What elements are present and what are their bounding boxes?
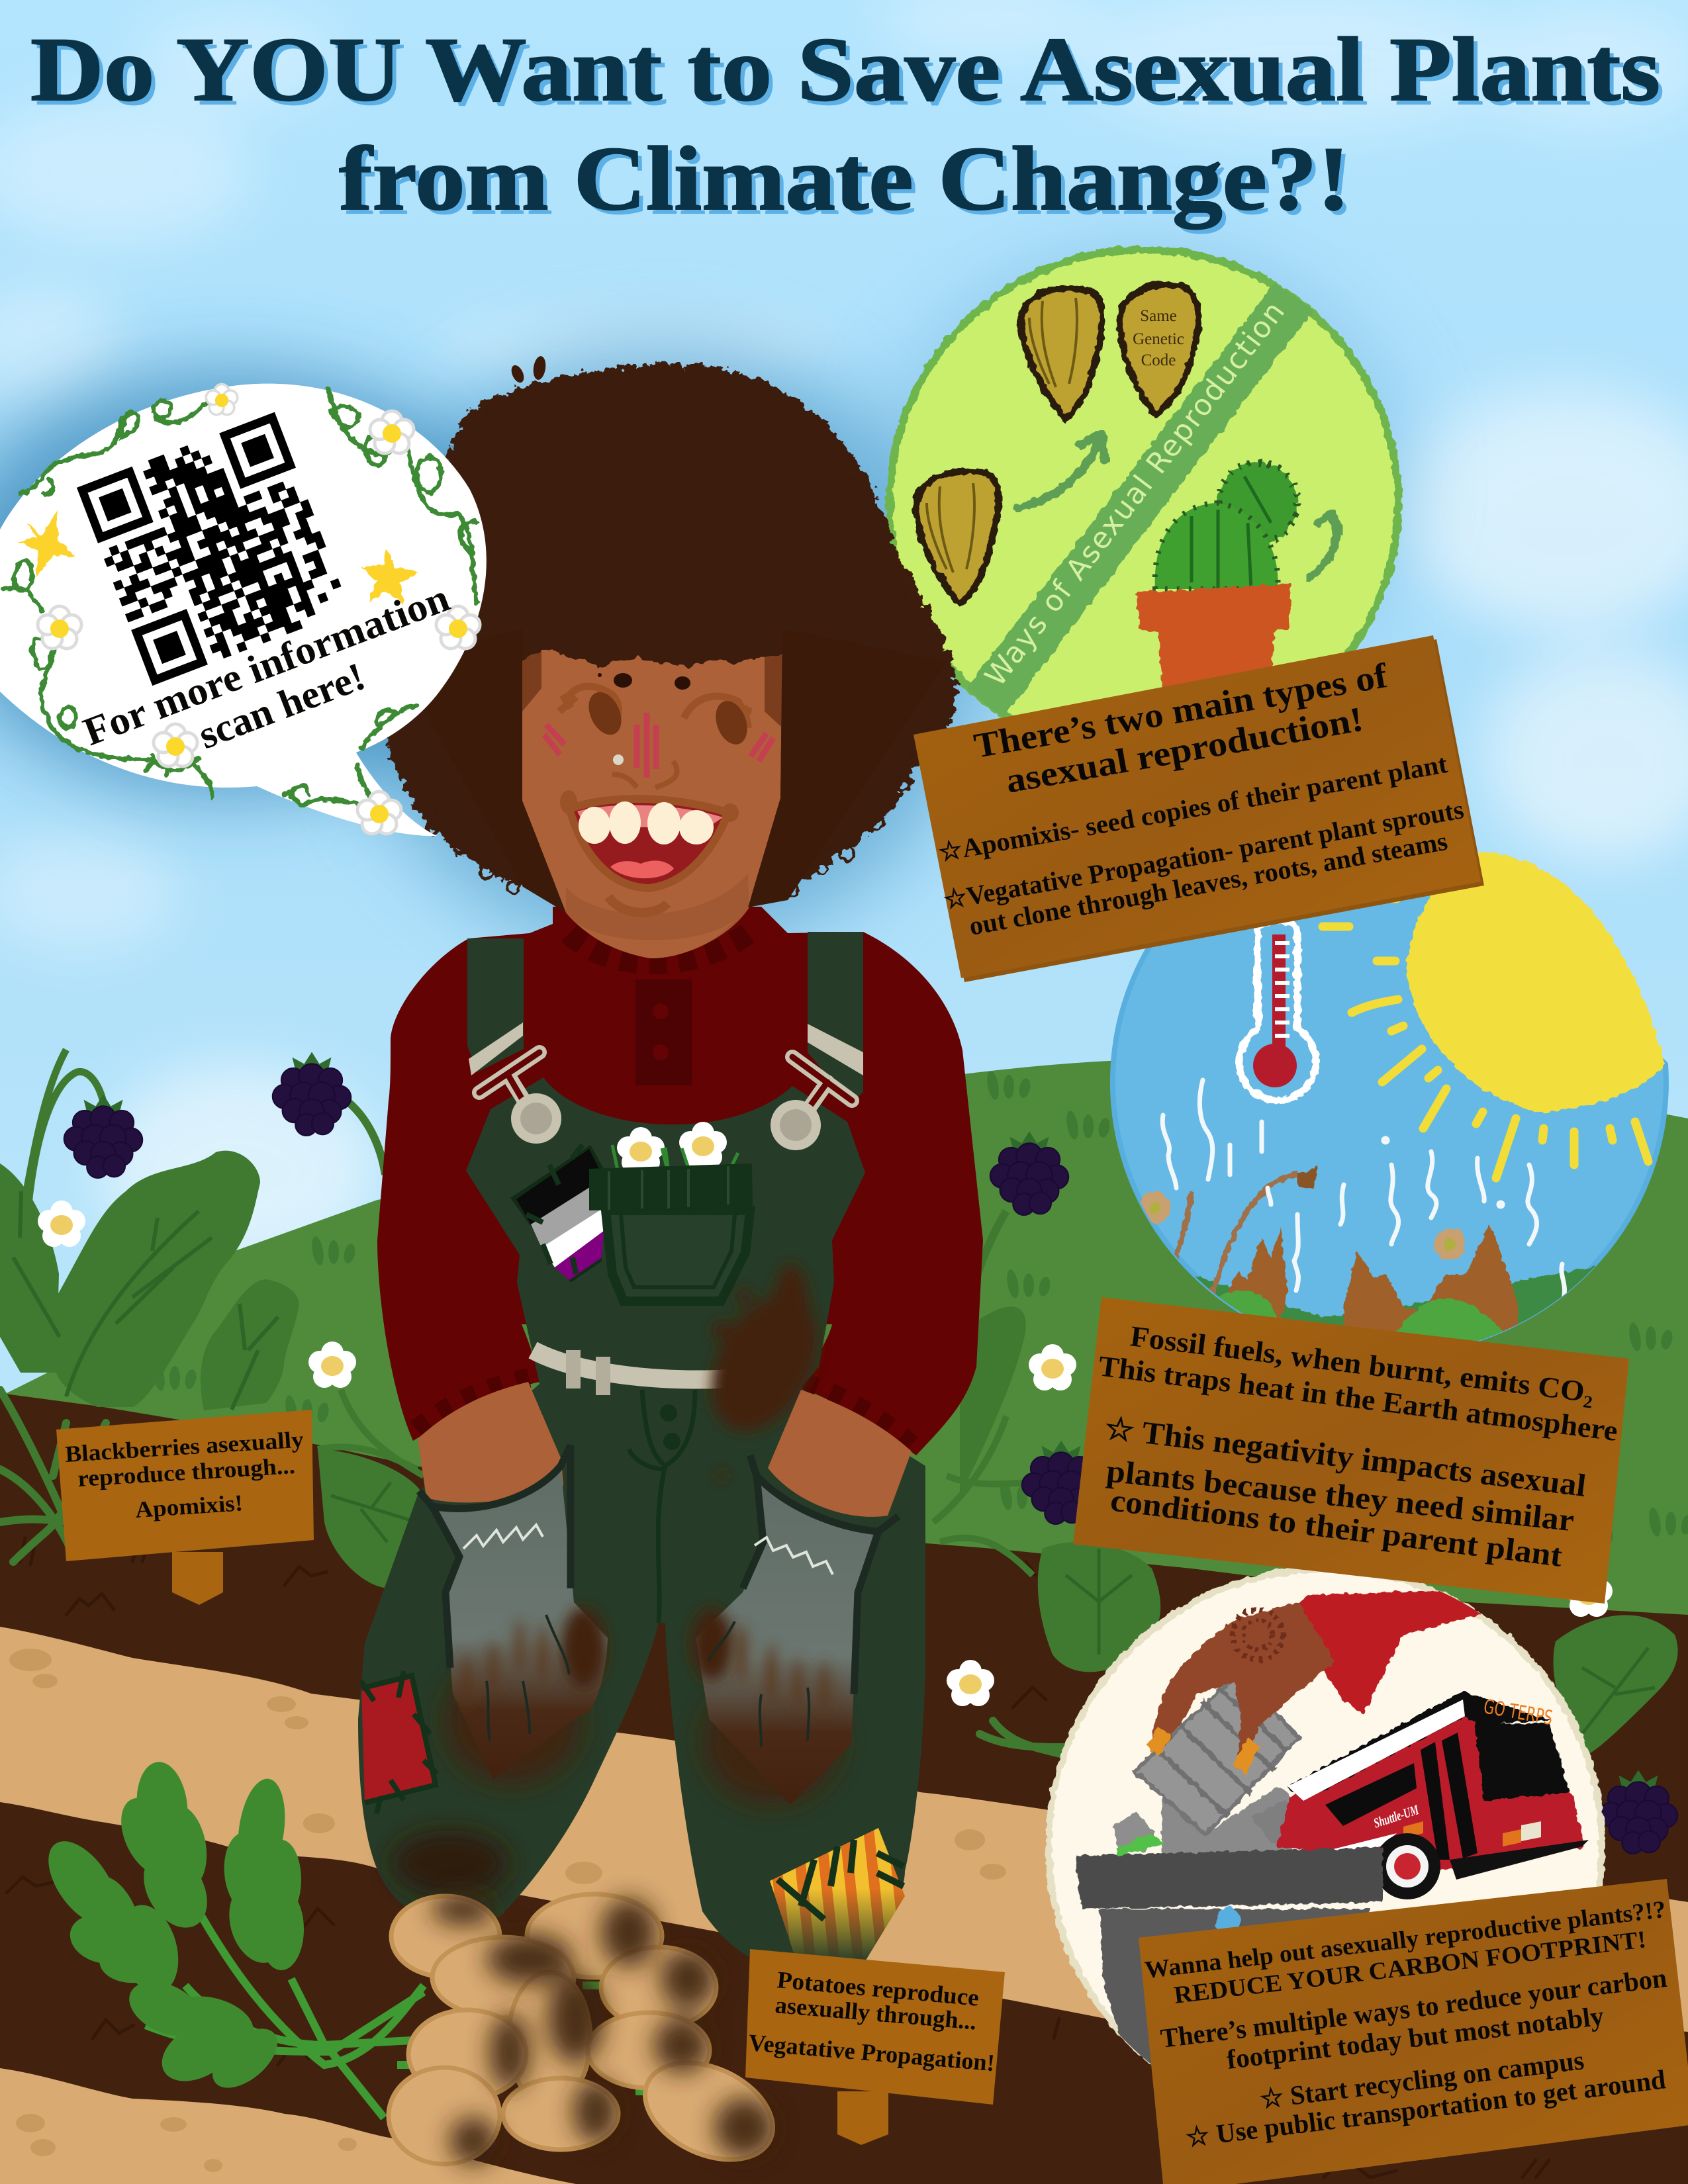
bullet list: ☆Apomixis- seed copies of their parent plant [936,749,1450,868]
icon: white flower [947,1660,994,1706]
potato leaves [35,1759,304,2099]
icon: seed with genetic code: Code [1141,351,1176,369]
icon: blackberry [273,1052,351,1136]
overall straps [467,932,863,1104]
icon: seed [916,471,998,604]
right glove [690,1455,898,1805]
diagonal banner: Ways of Asexual Reproduction [978,295,1291,693]
hair sides over face [397,629,947,913]
overalls [358,622,947,1962]
face markings [544,713,773,778]
icon: white flower [1565,1570,1613,1617]
grassy hills [0,1058,1688,1721]
sign: potatoes [745,1949,1005,2145]
potato plant [35,1759,655,2118]
icon: blackberry [1599,1770,1677,1854]
bullet list [936,749,1466,941]
arrow: cactus growth [1308,513,1341,578]
icon: sleeve and hand [1147,1588,1503,1774]
soil and sand bands [0,1393,1688,2184]
fly and stitching [629,1390,695,1623]
striped patch [770,1828,905,1962]
title: Do YOU Want to Save Asexual Plants [35,23,1665,124]
action list: ☆ Start recycling on campus [1258,2044,1585,2115]
nose stud and nose [612,754,677,788]
sign post [172,1552,223,1605]
sign text: asexually through... [774,1991,978,2034]
icon: sun rays [1323,899,1648,1178]
sign board [1139,1879,1688,2184]
circle: reduce carbon footprint [1049,1569,1602,2122]
icon: doodle flowers [38,385,480,834]
neck shading and face [522,641,782,958]
icon: seed [1021,289,1102,418]
heading: asexual reproduction! [1003,700,1366,801]
title: from Climate Change?! [339,128,1350,229]
impact text [1103,1410,1588,1574]
explanation: There’s multiple ways to reduce your carbon [1159,1962,1669,2054]
sparse ground [1119,1257,1668,1363]
impact text: conditions to their parent plant [1109,1482,1564,1574]
left plant with blackberries [0,1050,427,1588]
sign board [914,635,1481,978]
icon: seed with genetic code: Genetic [1133,330,1184,348]
title: from Climate Change?! [344,132,1355,234]
sign board [56,1410,314,1561]
speech bubble with QR code [0,384,487,836]
sign text: Vegatative Propagation! [747,2029,996,2076]
curly fringe [520,622,788,668]
icon: white flower [1029,1344,1076,1390]
call to action: REDUCE YOUR CARBON FOOTPRINT! [1172,1926,1648,2009]
heat waves [1162,1080,1565,1304]
icon: cactus in pot [1136,462,1297,728]
sign: reduce your carbon footprint [1139,1879,1688,2184]
icon: blackberry [64,1094,142,1178]
forearms [418,1382,912,1517]
impact text: ☆ This negativity impacts asexual [1103,1410,1588,1504]
smiling mouth [560,790,739,888]
sign text: Blackberries asexually [64,1426,305,1467]
temple tattoos [765,652,782,728]
mud smear on overalls [690,1264,839,1481]
icon: recycling cans [1112,1674,1311,1856]
icon: recycling bin [1075,1847,1383,2118]
arrow: seed to seed [1017,434,1105,508]
circle: ways of asexual reproduction [890,250,1398,756]
sign text [64,1426,305,1523]
overall bib and trousers [358,1077,925,1962]
sign text: Potatoes reproduce [776,1966,980,2011]
QR caption: For more information [77,576,455,754]
eyes [559,686,753,749]
mud on left cuff [391,1830,510,1896]
suspender buckles [479,1052,852,1126]
icon: blackberry [1022,1440,1100,1524]
sign board [745,1949,1005,2105]
hair [391,355,954,899]
sign post [837,2091,888,2145]
icon: seed with genetic code [1120,285,1198,414]
icon: white flower [308,1342,356,1388]
icon: campus shuttle bus [1277,1691,1589,1899]
heading [971,657,1391,801]
belt [533,1350,755,1395]
action list: ☆ Use public transportation to get around [1184,2064,1667,2153]
sign text: Apomixis! [134,1490,244,1523]
right plants, berries and flowers [933,1131,1678,1854]
icon: white flower [38,1201,85,1247]
QR caption: scan here! [193,654,371,757]
title [30,19,1665,234]
cause text: This traps heat in the Earth atmosphere [1097,1349,1620,1447]
icon: campus shuttle bus: GO TERPS [1482,1695,1554,1730]
icon: sun [1407,852,1665,1112]
potato stems [146,1899,655,2118]
QR code [78,416,349,682]
eyebrow dots [598,673,690,690]
bib pocket [589,1163,753,1301]
icon: campus shuttle bus: Shuttle-UM [1372,1801,1421,1831]
heading: There’s two main types of [971,657,1391,766]
chin curve [608,897,667,913]
bullet list: out clone through leaves, roots, and steams [967,826,1450,941]
call to action: Wanna help out asexually reproductive plants?!? [1143,1896,1667,1984]
title: Do YOU Want to Save Asexual Plants [30,19,1660,120]
sign text [747,1966,996,2076]
red heart patch [361,1671,437,1813]
icon: seed with genetic code: Same [1140,307,1177,325]
icon: blackberry [990,1131,1068,1215]
icon: thermometer [1239,920,1316,1101]
bullet list: ☆Vegatative Propagation- parent plant sprouts [941,794,1466,915]
sign: two types of asexual reproduction [914,635,1484,982]
flowers in pocket [612,1122,738,1173]
circle: climate change heat [1113,811,1668,1363]
left glove [419,1445,608,1786]
sign: blackberries [56,1410,314,1605]
vine decoration [3,387,477,807]
icon: yellow stars [19,511,419,605]
dead plants [1139,1167,1523,1363]
cause text: Fossil fuels, when burnt, emits CO₂ [1129,1320,1595,1409]
potatoes [389,1893,788,2179]
explanation: footprint today but most notably [1225,2000,1606,2075]
sign board [1073,1297,1629,1604]
sign text: reproduce through... [77,1453,296,1492]
sign: fossil fuels [1073,1297,1629,1604]
asexual pride flag patch [510,1145,604,1283]
impact text: plants because they need similar [1105,1453,1575,1538]
sweater [377,907,983,1455]
